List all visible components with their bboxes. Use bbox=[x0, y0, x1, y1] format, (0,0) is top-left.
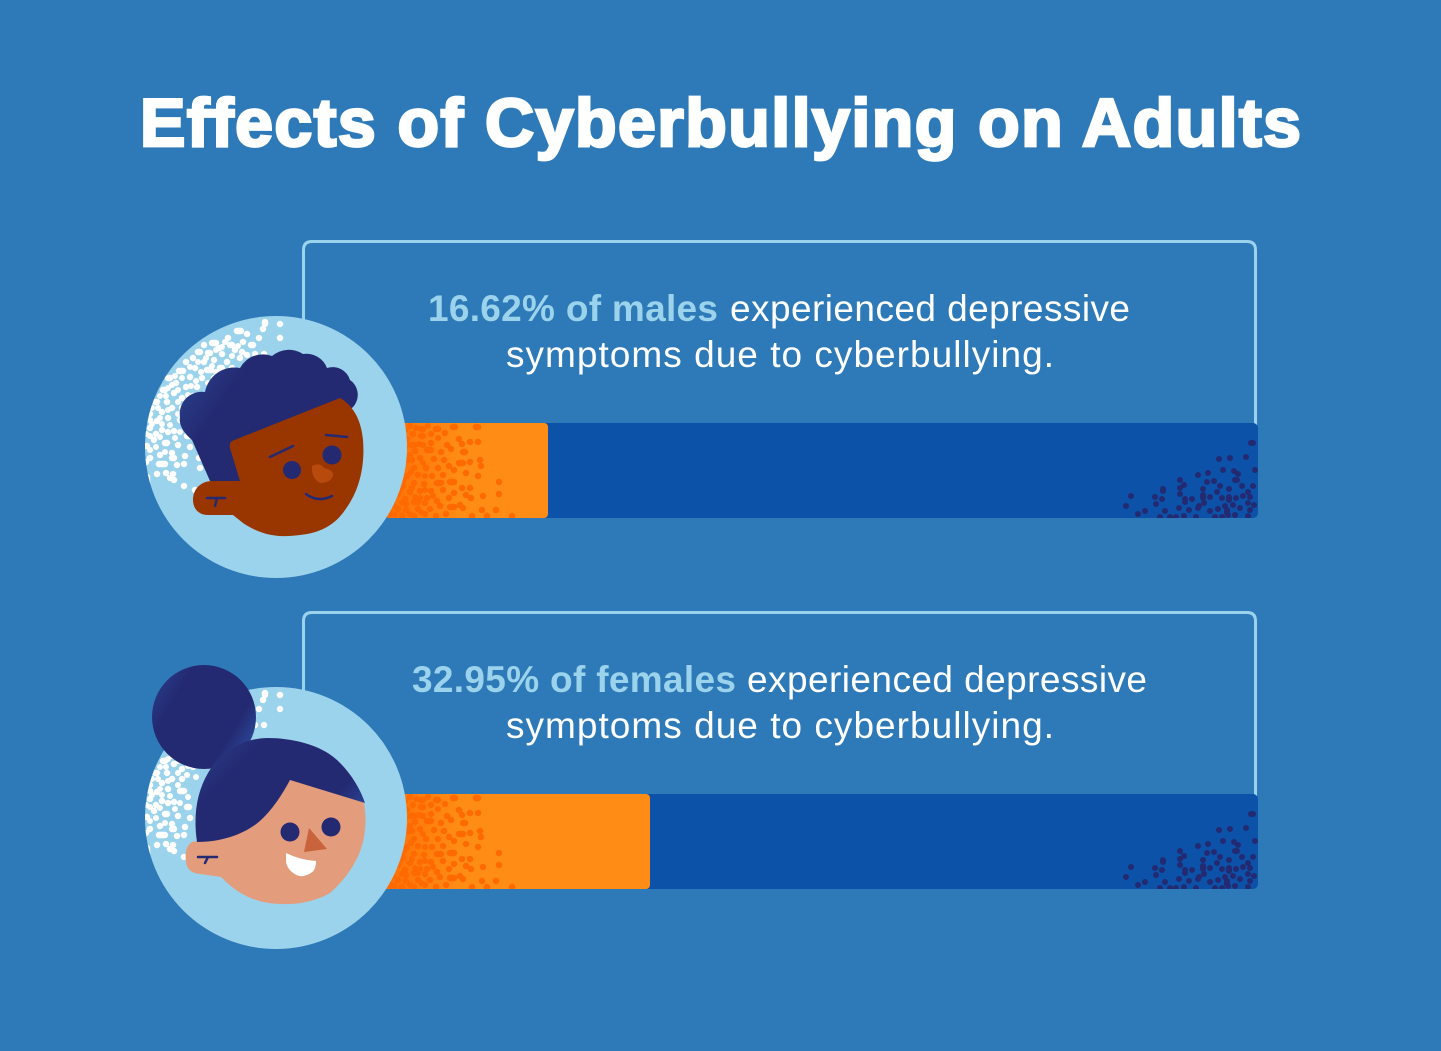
progress bar: males 16.62% bbox=[385, 423, 1258, 518]
statistic text: males: symptoms due to cyberbullying. bbox=[506, 334, 1054, 375]
panel: females bbox=[145, 612, 1258, 949]
icon: male face in circle bbox=[145, 316, 407, 578]
statistic text: females: experienced depressive bbox=[747, 659, 1147, 700]
statistic text: males: experienced depressive bbox=[730, 288, 1130, 329]
icon: female face in circle bbox=[145, 665, 407, 949]
statistic text: females: 32.95% of females bbox=[412, 659, 736, 700]
frame outline bbox=[304, 242, 1256, 430]
frame outline bbox=[304, 612, 1256, 801]
progress bar: females 32.95% bbox=[385, 794, 1258, 889]
statistic text: males: 16.62% of males bbox=[428, 288, 718, 329]
title: Effects of Cyberbullying on Adults bbox=[140, 85, 1301, 161]
statistic text: males bbox=[428, 288, 1130, 375]
panel: males bbox=[145, 242, 1258, 578]
statistic text: females bbox=[412, 659, 1147, 746]
statistic text: females: symptoms due to cyberbullying. bbox=[506, 705, 1054, 746]
